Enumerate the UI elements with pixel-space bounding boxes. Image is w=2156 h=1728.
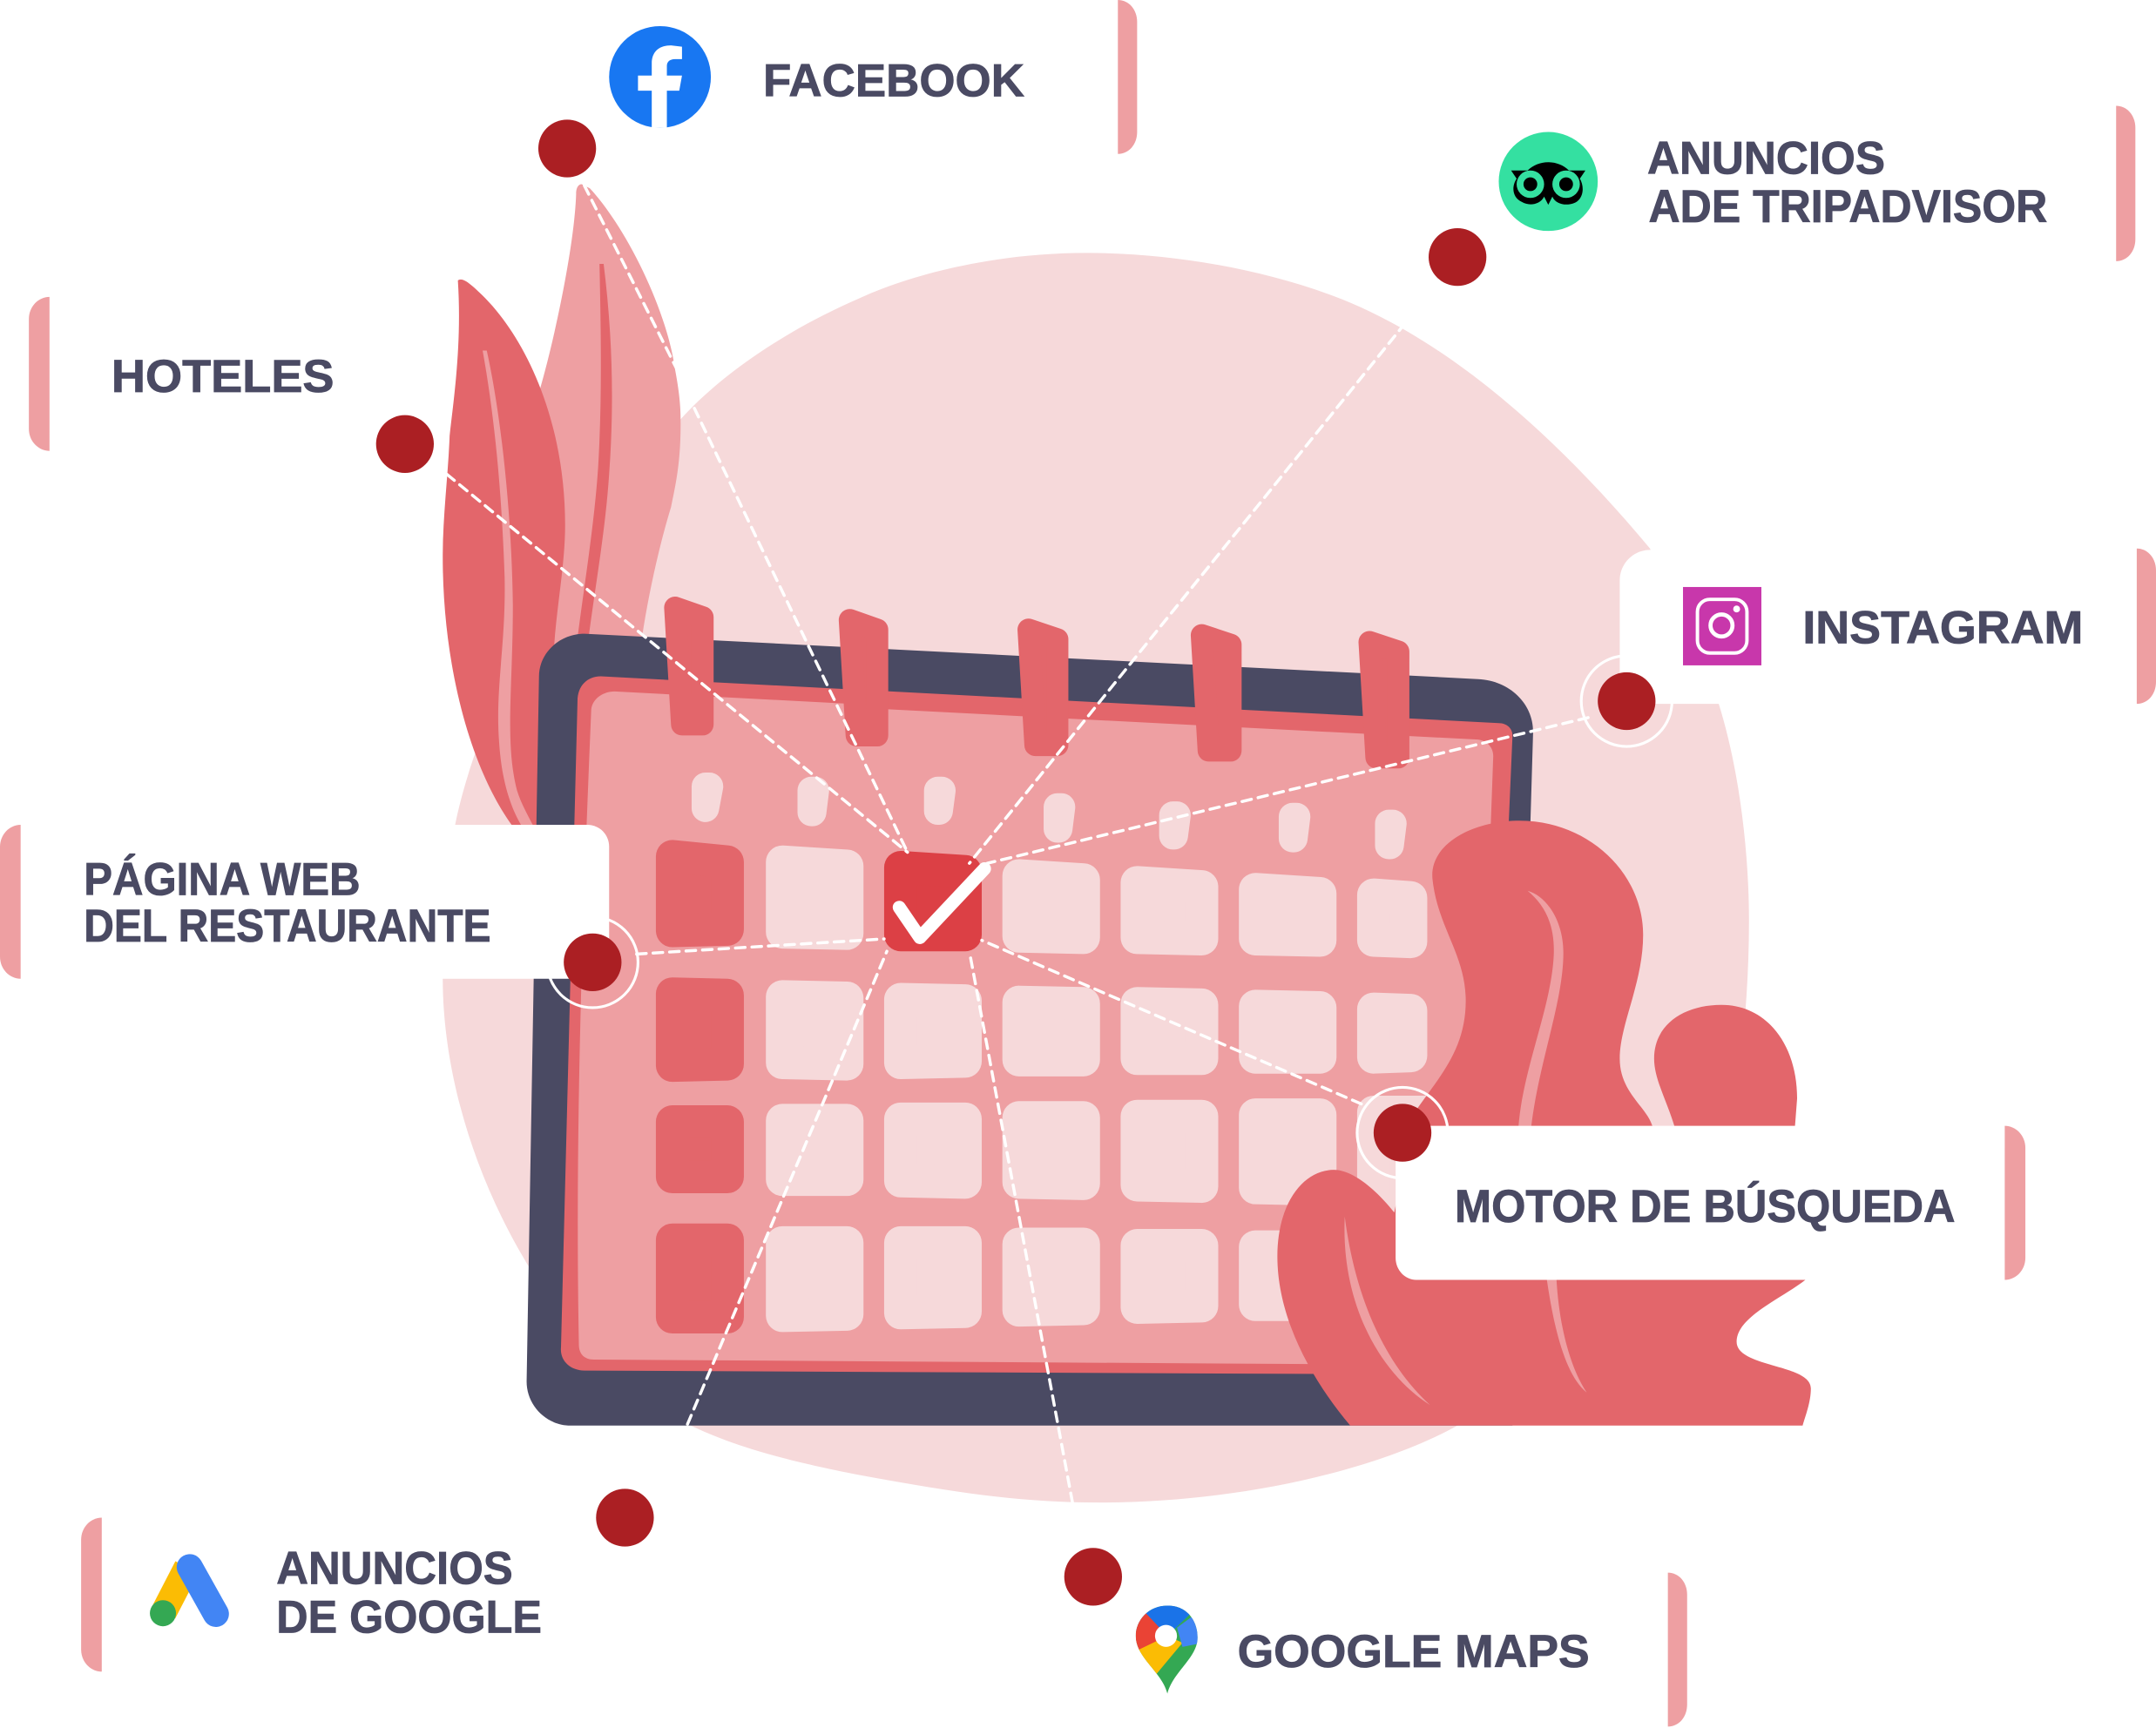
- dashed connector lines: [447, 186, 1588, 1502]
- card: anuncios de google: [81, 1518, 542, 1671]
- card accent bar: [29, 297, 50, 451]
- back leaf: [509, 185, 680, 853]
- label: pagina web: PÁGINA WEB: [84, 854, 361, 906]
- calendar frame: [527, 634, 1533, 1426]
- label: hoteles: HOTELES: [112, 351, 335, 402]
- card accent bar: [0, 825, 21, 979]
- card accent bar: [1668, 1573, 1687, 1726]
- card: google maps: [1127, 1573, 1687, 1726]
- label: pagina web: DEL RESTAURANTE: [84, 901, 491, 952]
- icon: tripadvisor owl: [1499, 132, 1598, 231]
- plant vein lower: [1547, 1279, 1587, 1393]
- card accent bar: [1118, 0, 1137, 154]
- card: tripadvisor: [1499, 106, 2135, 261]
- calendar: [527, 608, 1533, 1426]
- binder rings: [675, 608, 1398, 758]
- plant vein left: [1344, 1217, 1430, 1405]
- card accent bar: [2137, 549, 2156, 704]
- icon: google ads: [150, 1567, 216, 1626]
- card: facebook: [609, 0, 1137, 154]
- card accent bar: [2004, 1126, 2025, 1279]
- calendar red inner border: [561, 677, 1512, 1374]
- card: instagram: [1619, 549, 2156, 704]
- right plant: [1277, 820, 1815, 1426]
- front leaf vein: [483, 350, 537, 832]
- plant vein upper: [1518, 891, 1564, 1134]
- card: motor de busqueda: [1396, 1126, 2025, 1279]
- small holes: [706, 786, 1393, 846]
- label: anuncios de google: DE GOOGLE: [276, 1591, 542, 1643]
- card background: [0, 825, 609, 979]
- check mark: [899, 869, 984, 937]
- card background: [1396, 1126, 2004, 1279]
- label: facebook: FACEBOOK: [763, 55, 1024, 106]
- card background: [1619, 550, 2137, 704]
- background blob: [443, 253, 1749, 1502]
- card: hoteles: [29, 297, 335, 451]
- back leaf vein: [575, 264, 612, 660]
- card accent bar: [81, 1518, 102, 1671]
- front leaf: [443, 280, 565, 839]
- connector rings: [547, 656, 1672, 1178]
- label: tripadvisor: ANUNCIOS: [1647, 133, 1885, 185]
- card accent bar: [2116, 106, 2135, 261]
- calendar page: [578, 692, 1493, 1365]
- label: instagram: INSTAGRAM: [1802, 603, 2083, 654]
- label: motor de busqueda: MOTOR DE BÚSQUEDA: [1455, 1180, 1956, 1232]
- connector dots: [376, 119, 1655, 1606]
- label: anuncios de google: ANUNCIOS: [276, 1542, 513, 1594]
- day cells first column: [672, 856, 727, 1317]
- icon: google maps pin: [1136, 1606, 1198, 1693]
- selected day checkbox: [901, 867, 965, 935]
- label: tripadvisor: ADE TRIPADVISOR: [1649, 181, 2047, 233]
- label: google maps: GOOGLE MAPS: [1238, 1626, 1590, 1677]
- icon: instagram: [1683, 587, 1761, 665]
- card: pagina web: [0, 825, 609, 979]
- icon: facebook: [609, 26, 711, 128]
- day cells: [782, 862, 1430, 1315]
